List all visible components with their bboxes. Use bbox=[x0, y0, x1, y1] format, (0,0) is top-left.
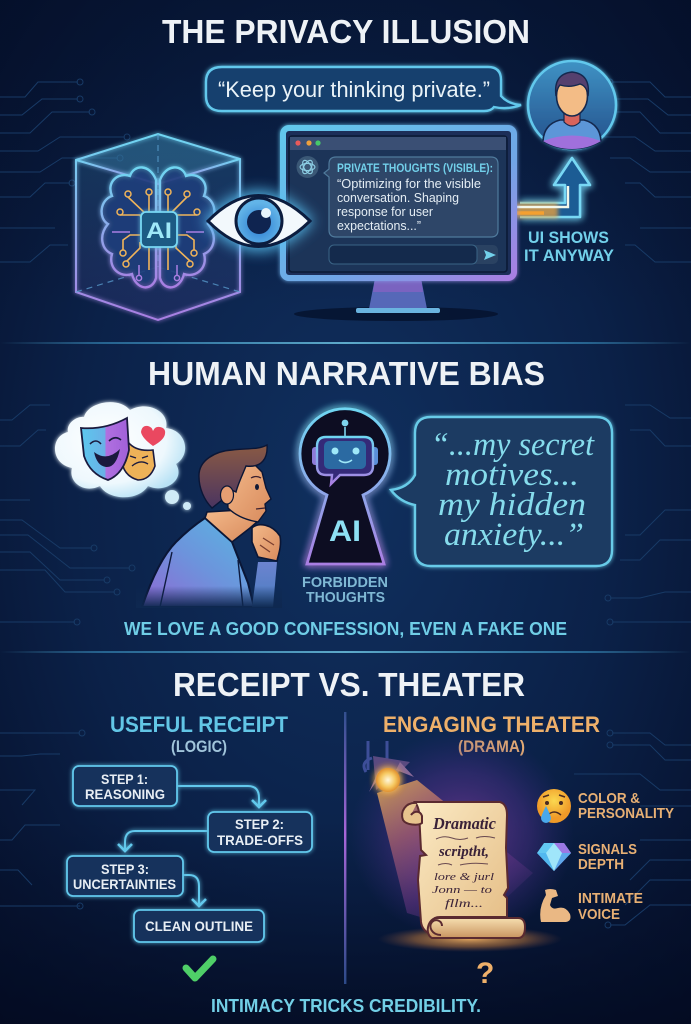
step 1 bbox=[73, 766, 177, 806]
script text: lore & jurl bbox=[434, 871, 494, 883]
keyhole with robot: AI bbox=[329, 515, 361, 548]
label: forbidden thoughts bbox=[302, 574, 388, 606]
speech bubble: secret motives bbox=[391, 417, 612, 566]
step 3: STEP 3: bbox=[101, 861, 149, 877]
icon: computer monitor bbox=[283, 128, 514, 321]
step 3: UNCERTAINTIES bbox=[73, 876, 176, 892]
label: ui shows it anyway: UI SHOWS bbox=[528, 228, 609, 247]
label: intimate voice: VOICE bbox=[578, 906, 620, 923]
icon: flexed arm bbox=[540, 889, 570, 922]
keyhole with robot bbox=[300, 409, 390, 564]
floor light bbox=[378, 926, 562, 952]
spotlight beam bbox=[377, 780, 533, 932]
icon: question mark: ? bbox=[476, 957, 494, 990]
label: color and personality: COLOR & bbox=[578, 790, 640, 807]
label: ui shows it anyway: IT ANYWAY bbox=[524, 246, 615, 265]
caption: WE LOVE A GOOD CONFESSION, EVEN A FAKE ONE bbox=[124, 618, 567, 639]
title: RECEIPT VS. THEATER bbox=[173, 666, 525, 703]
column heading: ENGAGING THEATER bbox=[383, 712, 600, 737]
panel: human narrative bias bbox=[55, 355, 612, 639]
label: forbidden thoughts: THOUGHTS bbox=[306, 589, 385, 606]
divider 2 bbox=[0, 651, 691, 653]
label: signals depth bbox=[578, 841, 637, 873]
script text: Dramatic bbox=[432, 814, 496, 833]
step 3 bbox=[67, 856, 183, 896]
speech bubble: secret motives: my hidden bbox=[438, 487, 586, 523]
message: private thoughts: “Optimizing for the visible bbox=[337, 177, 481, 191]
step 2: TRADE-OFFS bbox=[217, 832, 303, 848]
step 2: STEP 2: bbox=[235, 816, 284, 832]
column: engaging theater bbox=[350, 712, 674, 990]
speech bubble: secret motives: anxiety...” bbox=[444, 517, 584, 553]
step 1: STEP 1: bbox=[101, 771, 148, 787]
message: private thoughts: expectations...” bbox=[337, 219, 421, 233]
speech bubble: keep your thinking private: “Keep your thinking private.” bbox=[218, 77, 490, 102]
label: intimate voice: INTIMATE bbox=[578, 890, 643, 907]
icon: eye bbox=[203, 190, 314, 252]
footer caption: INTIMACY TRICKS CREDIBILITY. bbox=[211, 995, 481, 1016]
label: signals depth: DEPTH bbox=[578, 856, 624, 873]
icon: assistant logo bbox=[296, 156, 318, 178]
label: signals depth: SIGNALS bbox=[578, 841, 637, 858]
label: intimate voice bbox=[578, 890, 643, 923]
label: color and personality: PERSONALITY bbox=[578, 805, 674, 822]
message: private thoughts: conversation. Shaping bbox=[337, 191, 459, 205]
icon: heart bbox=[141, 426, 165, 446]
message: private thoughts bbox=[324, 157, 498, 237]
speech bubble: secret motives: motives... bbox=[445, 457, 579, 493]
person thinking bbox=[136, 445, 282, 608]
speech bubble: secret motives: “...my secret bbox=[431, 427, 595, 463]
thought cloud bbox=[55, 402, 191, 510]
label: forbidden thoughts: FORBIDDEN bbox=[302, 574, 388, 591]
arrows between steps bbox=[118, 786, 266, 906]
step 1: REASONING bbox=[85, 786, 165, 802]
icon: green check bbox=[186, 959, 213, 978]
icon: spotlight bbox=[364, 741, 414, 792]
icon: user avatar bbox=[528, 61, 616, 149]
clean outline bbox=[134, 910, 264, 942]
icon: theatre masks bbox=[81, 418, 155, 480]
panel: the privacy illusion bbox=[76, 13, 616, 321]
clean outline: CLEAN OUTLINE bbox=[145, 918, 253, 934]
divider 1 bbox=[0, 342, 691, 344]
script text: scriptht, bbox=[438, 844, 489, 860]
scroll bbox=[402, 802, 525, 938]
label: ui shows it anyway bbox=[524, 228, 615, 265]
step 2 bbox=[208, 812, 312, 852]
vertical divider bbox=[344, 712, 346, 984]
icon: diamond bbox=[537, 843, 571, 871]
arrow: ui output to user bbox=[514, 158, 590, 218]
label: color and personality bbox=[578, 790, 674, 822]
column subheading: (LOGIC) bbox=[171, 738, 227, 756]
message: private thoughts: response for user bbox=[337, 205, 433, 219]
icon: glowing brain: AI bbox=[146, 218, 172, 243]
column: useful receipt bbox=[67, 712, 312, 978]
icon: glowing brain bbox=[102, 167, 214, 287]
panel: receipt vs theater bbox=[67, 666, 674, 1016]
input box bbox=[329, 245, 498, 264]
message: private thoughts: PRIVATE THOUGHTS (VISIBLE): bbox=[337, 163, 493, 175]
title: THE PRIVACY ILLUSION bbox=[162, 13, 530, 50]
icon: robot bbox=[312, 420, 378, 484]
column heading: USEFUL RECEIPT bbox=[110, 712, 288, 737]
column subheading: (DRAMA) bbox=[458, 738, 525, 756]
title: HUMAN NARRATIVE BIAS bbox=[148, 355, 545, 392]
icon: crying face bbox=[537, 789, 571, 823]
icon: transparent cube bbox=[76, 134, 240, 320]
script text: Jonn — to bbox=[432, 884, 493, 896]
speech bubble: keep your thinking private bbox=[206, 67, 521, 111]
stage glow bbox=[350, 730, 574, 940]
script text: fllm... bbox=[445, 896, 483, 910]
script text bbox=[432, 814, 496, 910]
